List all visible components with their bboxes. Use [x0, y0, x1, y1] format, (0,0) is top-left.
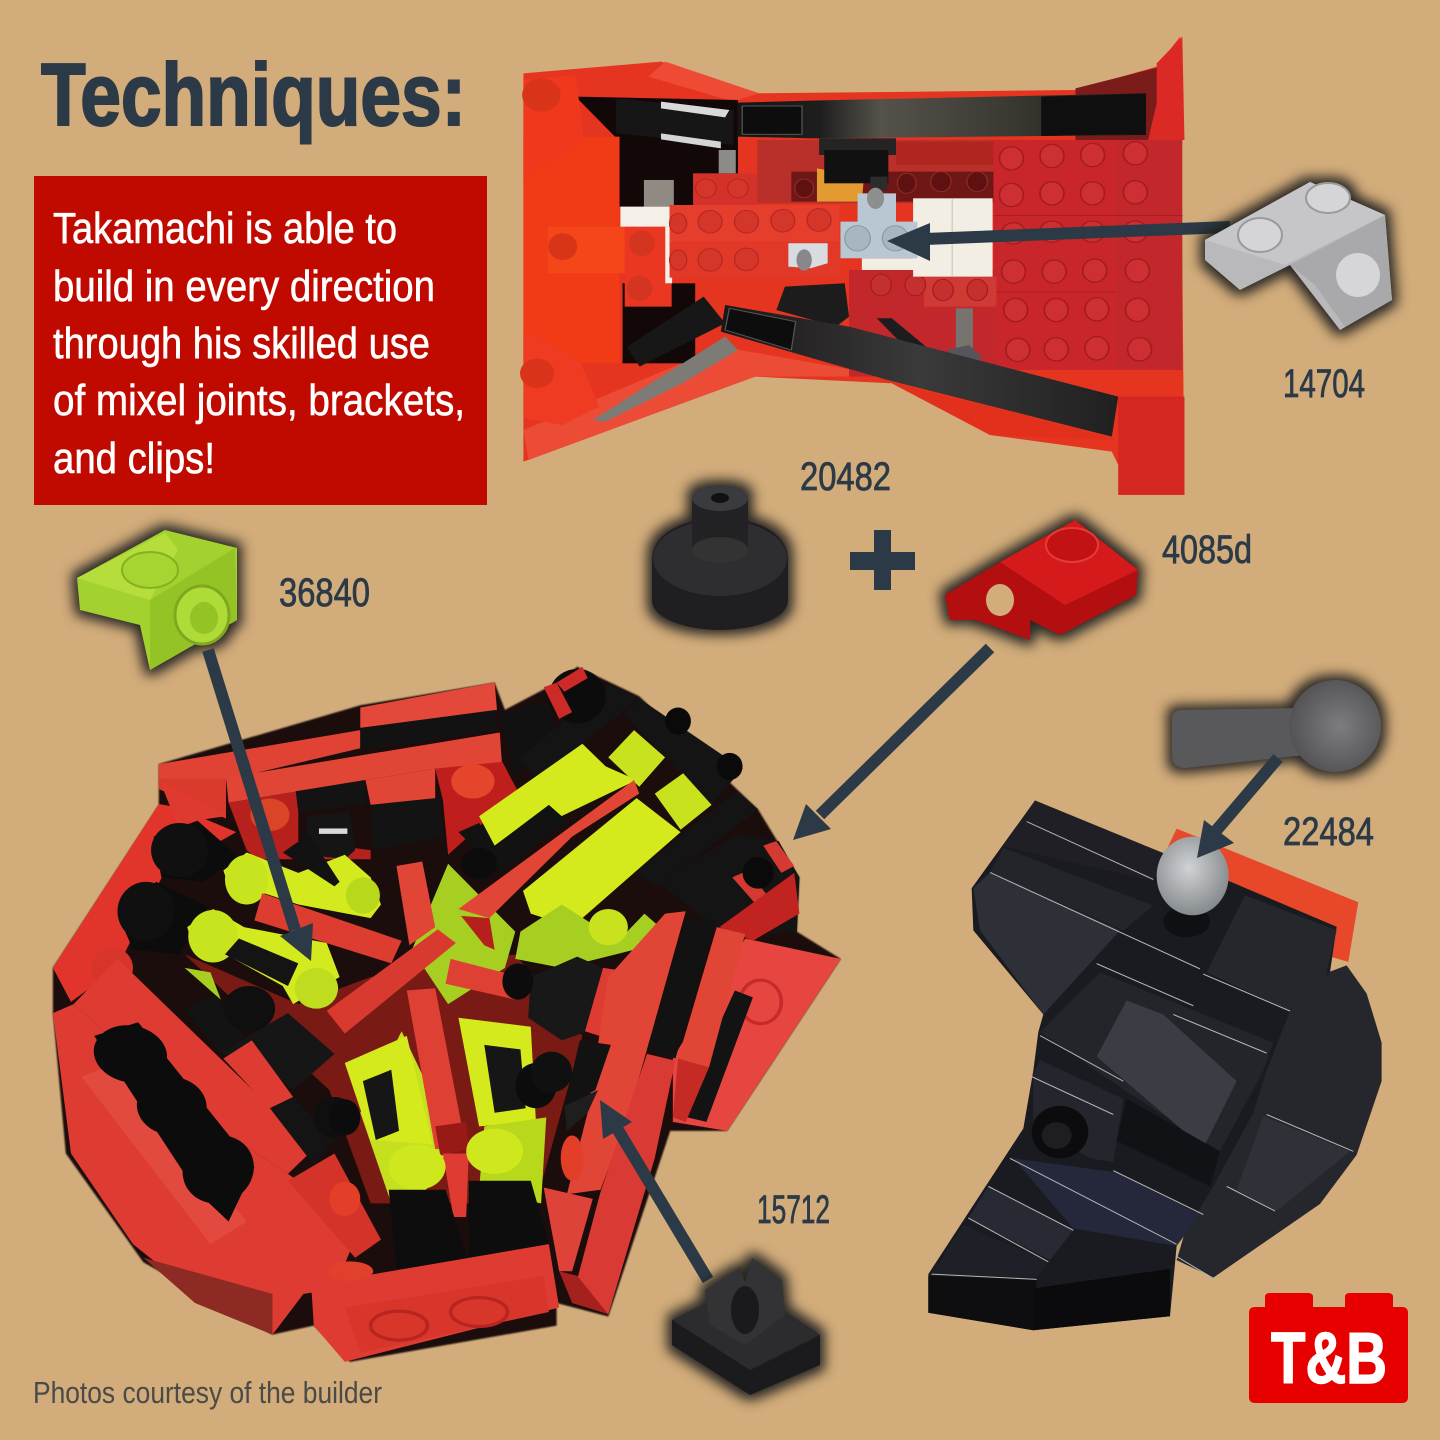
photo: black wedge assembly — [928, 801, 1382, 1330]
top right yellow — [479, 744, 637, 846]
white strips — [620, 207, 670, 227]
right red plates — [993, 140, 1115, 370]
part icon: 14704 light gray plate — [1205, 182, 1392, 330]
bottom left fan — [53, 1004, 360, 1335]
bottom red brick — [311, 1244, 559, 1362]
right red wedge — [673, 938, 841, 1131]
label: 36840: 36840 — [279, 571, 370, 615]
part icon: 20482 round black — [652, 485, 788, 630]
lower left block — [74, 959, 314, 1174]
callout: red text panel: through his skilled use — [53, 319, 430, 368]
upper mid area — [757, 140, 996, 203]
mid red plates — [670, 205, 839, 242]
arrow: 36840 to cluster — [208, 650, 313, 961]
part icon: 15712 black clip tile — [672, 1258, 820, 1395]
black clips — [819, 138, 896, 155]
lower mid red — [849, 270, 996, 377]
far right — [657, 834, 799, 936]
callout: red text panel: and clips! — [53, 434, 215, 483]
part icon: 4085d red clip plate — [945, 520, 1138, 640]
logo: T&B red brick — [1249, 1293, 1408, 1403]
interior dark — [576, 97, 738, 207]
left red bracket — [53, 804, 236, 1002]
right long bricks — [585, 968, 634, 1040]
title: Techniques: — [41, 45, 466, 144]
label: 22484: 22484 — [1283, 810, 1374, 854]
part icon: 36840 lime bracket — [77, 530, 237, 670]
callout: red text panel: build in every direction — [53, 262, 435, 311]
lower black bar — [721, 305, 1118, 437]
label: 20482: 20482 — [800, 455, 891, 499]
top black bar — [738, 93, 1146, 138]
label: 4085d: 4085d — [1162, 528, 1252, 572]
arrow: 22484 to ball — [1197, 758, 1278, 858]
arrow: 4085d to cluster — [793, 648, 990, 840]
callout: red text panel: of mixel joints, brackets, — [53, 376, 465, 425]
top right black frame — [500, 701, 557, 778]
black angled piece top — [616, 98, 734, 145]
callout: red text panel: Takamachi is able to — [53, 204, 397, 253]
black side clips — [528, 957, 603, 1040]
part icon: 22484 gray ball joint — [1172, 680, 1381, 772]
label: 14704: 14704 — [1283, 362, 1365, 406]
top bricks — [159, 730, 360, 816]
bottom lime pair — [360, 1031, 453, 1244]
arrow: to part 14704 in photo — [887, 223, 1230, 261]
white bricks — [913, 198, 993, 277]
label: 15712: 15712 — [757, 1188, 830, 1232]
photo credit: Photos courtesy of the builder — [33, 1375, 382, 1410]
icon: plus sign — [850, 530, 915, 590]
logo: T&B red brick: T&B — [1271, 1319, 1387, 1399]
left bricks — [523, 137, 620, 363]
callout: red text panel — [34, 176, 487, 505]
photo: interior of model from above — [520, 37, 1184, 495]
arrow: 15712 to cluster — [600, 1100, 708, 1280]
photo: lime and red assembled cluster — [53, 667, 841, 1362]
light gray clip piece — [840, 193, 917, 258]
center red sticks — [254, 893, 402, 963]
left cylinders — [154, 821, 239, 882]
